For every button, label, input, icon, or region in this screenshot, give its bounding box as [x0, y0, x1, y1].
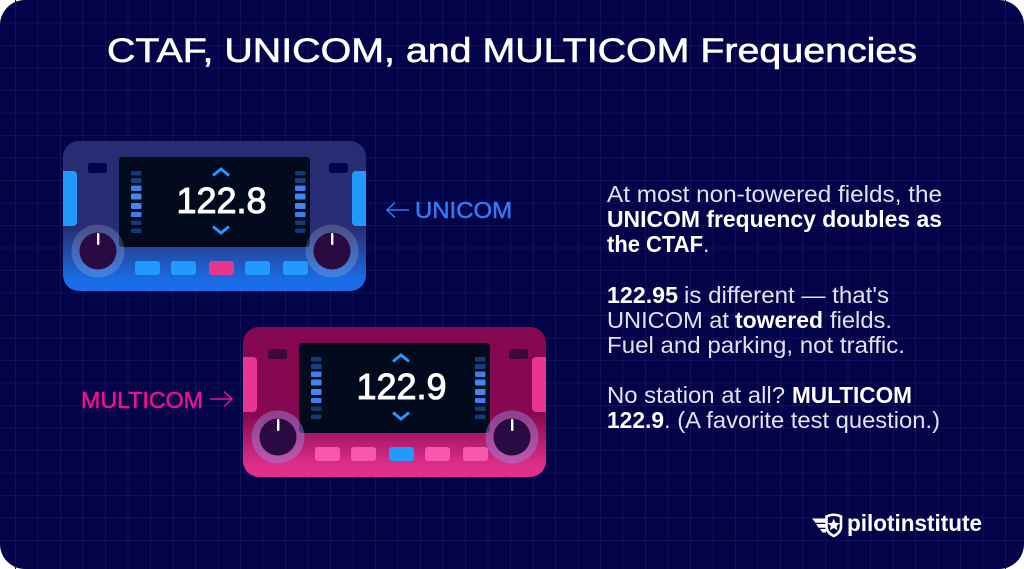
- arrow left: [387, 202, 409, 218]
- status slots: [268, 349, 528, 359]
- knob left: [252, 410, 304, 464]
- text block: 122.95: towered: [735, 307, 823, 333]
- chevron down: [393, 412, 409, 419]
- knob right: [306, 224, 358, 278]
- display screen: [119, 157, 310, 247]
- logo: pilotinstitute: pilotinstitute: [847, 510, 982, 536]
- text block: MULTICOM: [607, 382, 940, 433]
- text block: UNICOM and CTAF: .: [703, 231, 709, 257]
- text block: UNICOM and CTAF: the CTAF: [607, 231, 703, 257]
- buttons row: [315, 447, 488, 461]
- chevron up: [213, 169, 229, 176]
- text block: MULTICOM: 122.9: [607, 407, 664, 433]
- text block: UNICOM and CTAF: [607, 181, 942, 257]
- text block: MULTICOM: . (A favorite test question.): [664, 407, 940, 433]
- text block: 122.95: [607, 282, 905, 358]
- level meter left: [131, 171, 142, 233]
- radio body: [243, 327, 546, 477]
- status slots: [88, 163, 348, 173]
- label: MULTICOM with arrow: MULTICOM: [81, 387, 203, 413]
- radio body: [63, 141, 366, 291]
- text block: 122.95: Fuel and parking, not traffic.: [607, 332, 905, 358]
- text block: 122.95: is different — that's: [684, 282, 889, 308]
- text block: 122.95: 122.95: [607, 282, 678, 308]
- icon: winged shield: [812, 515, 841, 536]
- level meter right: [295, 171, 306, 233]
- label: UNICOM with arrow: UNICOM: [415, 197, 512, 223]
- text block: UNICOM and CTAF: At most non-towered fields, the: [607, 181, 942, 207]
- panel: MULTICOM radio: [243, 327, 546, 477]
- knob right: [486, 410, 538, 464]
- text block: 122.95: fields.: [830, 307, 892, 333]
- side tabs: [243, 357, 546, 412]
- title: CTAF, UNICOM, and MULTICOM Frequencies: [107, 32, 917, 70]
- chevron down: [213, 226, 229, 233]
- chevron up: [393, 355, 409, 362]
- text block: MULTICOM: MULTICOM: [792, 382, 912, 408]
- frequency readout: 122.9: [356, 366, 447, 407]
- buttons row: [135, 261, 308, 275]
- text block: UNICOM and CTAF: UNICOM frequency doubles as: [607, 206, 942, 232]
- knob left: [72, 224, 124, 278]
- arrow right: [210, 392, 232, 406]
- level meter left: [311, 357, 322, 419]
- display screen: [299, 343, 490, 433]
- level meter right: [475, 357, 486, 419]
- text block: MULTICOM: No station at all?: [607, 382, 785, 408]
- panel: UNICOM radio: [63, 141, 366, 291]
- frequency readout: 122.8: [176, 180, 267, 221]
- text block: 122.95: UNICOM at: [607, 307, 730, 333]
- side tabs: [63, 171, 366, 226]
